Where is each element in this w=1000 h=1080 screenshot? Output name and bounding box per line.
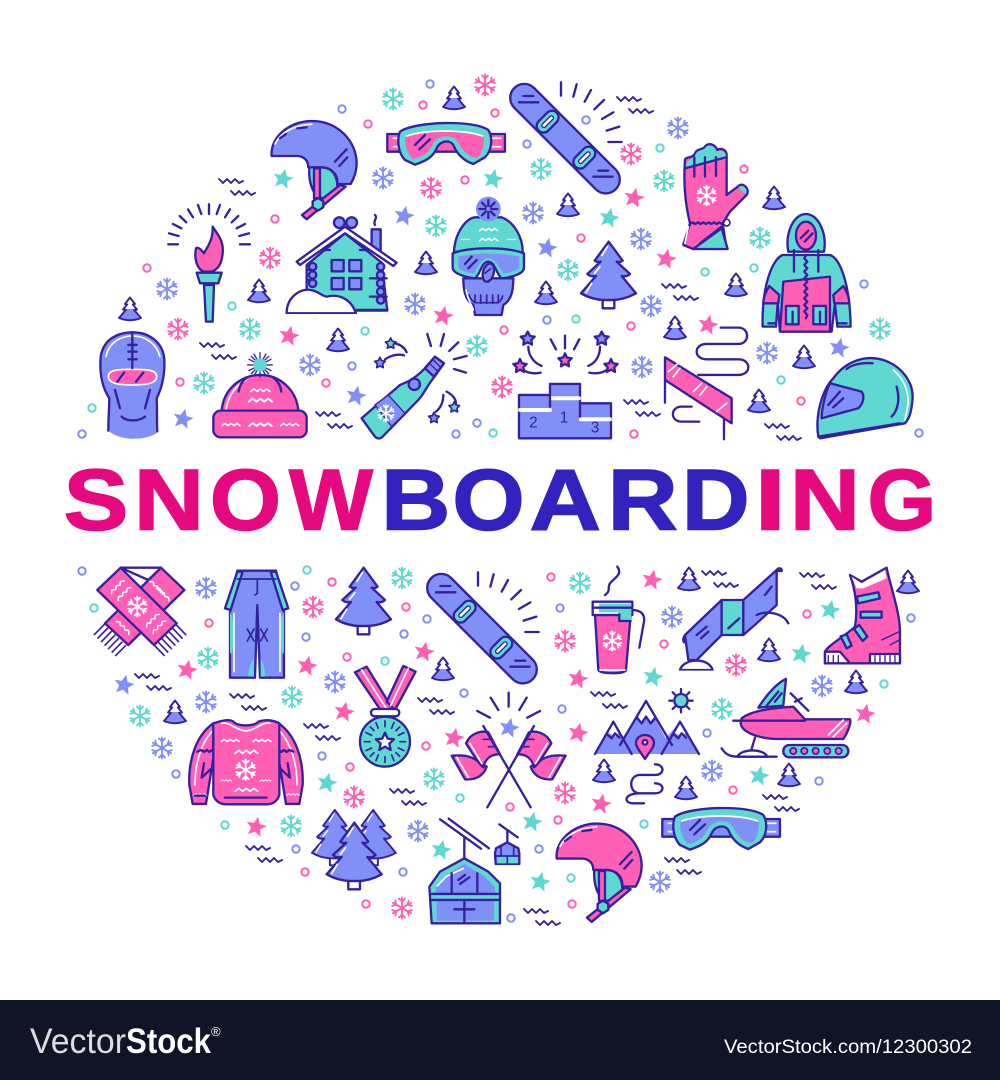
icon: periwinkle helmet — [272, 121, 357, 219]
podium number one: 1 — [560, 409, 568, 426]
heading: SNOWBOARDING: D — [682, 452, 750, 548]
icon: goggles with pink lens — [387, 123, 505, 165]
icon: top snowboard — [504, 78, 626, 199]
icon: lower pine tree — [336, 568, 391, 634]
heading: SNOWBOARDING: N — [134, 452, 204, 548]
icon: big pine tree — [581, 242, 636, 308]
icon: snowmobile — [722, 679, 850, 757]
icon: neck gaiter — [678, 568, 788, 675]
icon: Christmas sweater — [189, 720, 303, 804]
icon: lower snowboard — [421, 568, 543, 689]
icon: small gondola cabin — [495, 824, 519, 864]
icon: medal — [355, 666, 416, 767]
icon: pink helmet — [557, 824, 642, 922]
heading: SNOWBOARDING: W — [289, 452, 373, 548]
footer image id: VectorStock.com/12300302 — [724, 1036, 972, 1058]
podium number three: 3 — [591, 420, 599, 437]
footer logo: VectorStock: Vector — [30, 1022, 126, 1061]
decor: pink snowflakes — [167, 74, 747, 918]
decor: small pine trees — [119, 86, 919, 799]
icon: balaclava — [100, 332, 164, 439]
heading: SNOWBOARDING: I — [755, 452, 786, 548]
heading: SNOWBOARDING: O — [452, 452, 525, 548]
decor: teal stars — [271, 167, 842, 893]
decor: pink stars — [175, 186, 877, 838]
footer bar — [0, 1000, 1000, 1080]
podium number two: 2 — [529, 414, 538, 431]
icon: group of pine trees — [312, 810, 396, 889]
icon: jacket with hood — [763, 214, 851, 332]
icon: glove — [683, 144, 748, 249]
decor: wavy squiggles — [135, 97, 836, 925]
icon: large gondola cabin — [429, 819, 500, 923]
icon: goggles with periwinkle lens — [662, 808, 780, 850]
icon: mountains with location pin — [595, 689, 699, 803]
icon: log cabin — [285, 215, 397, 318]
icon: pink bobble hat — [213, 353, 307, 437]
decor: periwinkle rings — [78, 80, 923, 922]
heading: SNOWBOARDING — [64, 452, 936, 548]
heading: SNOWBOARDING: O — [210, 452, 281, 548]
icon: crossed flags — [452, 693, 566, 807]
heading: SNOWBOARDING: A — [530, 452, 601, 548]
icon: scarf — [97, 568, 184, 652]
heading: SNOWBOARDING: B — [381, 452, 450, 548]
icon: podium with stars — [513, 332, 618, 438]
decor: teal rings — [88, 144, 888, 882]
icon: teal full-face helmet — [817, 358, 913, 438]
heading: SNOWBOARDING: G — [868, 452, 936, 548]
icon: ski boot — [825, 568, 900, 663]
heading: SNOWBOARDING: R — [608, 452, 678, 548]
decor: periwinkle stars — [112, 204, 851, 739]
icon: travel mug — [593, 567, 644, 673]
decor: periwinkle snowflakes — [151, 118, 833, 892]
footer logo: VectorStock: Stock — [126, 1022, 211, 1061]
icon: torch — [168, 204, 250, 322]
footer logo: VectorStock — [30, 1022, 221, 1061]
decor: pink rings — [143, 101, 811, 908]
footer logo: VectorStock: ® — [211, 1024, 221, 1039]
decor: teal snowflakes — [129, 88, 891, 836]
icon: skull with beanie and goggles — [453, 197, 524, 315]
heading: SNOWBOARDING: S — [64, 452, 128, 548]
heading: SNOWBOARDING: N — [790, 452, 860, 548]
icon: slope banner and winding trail — [665, 328, 748, 439]
icon: snow pants — [225, 571, 288, 678]
icon: champagne bottle — [362, 334, 467, 438]
